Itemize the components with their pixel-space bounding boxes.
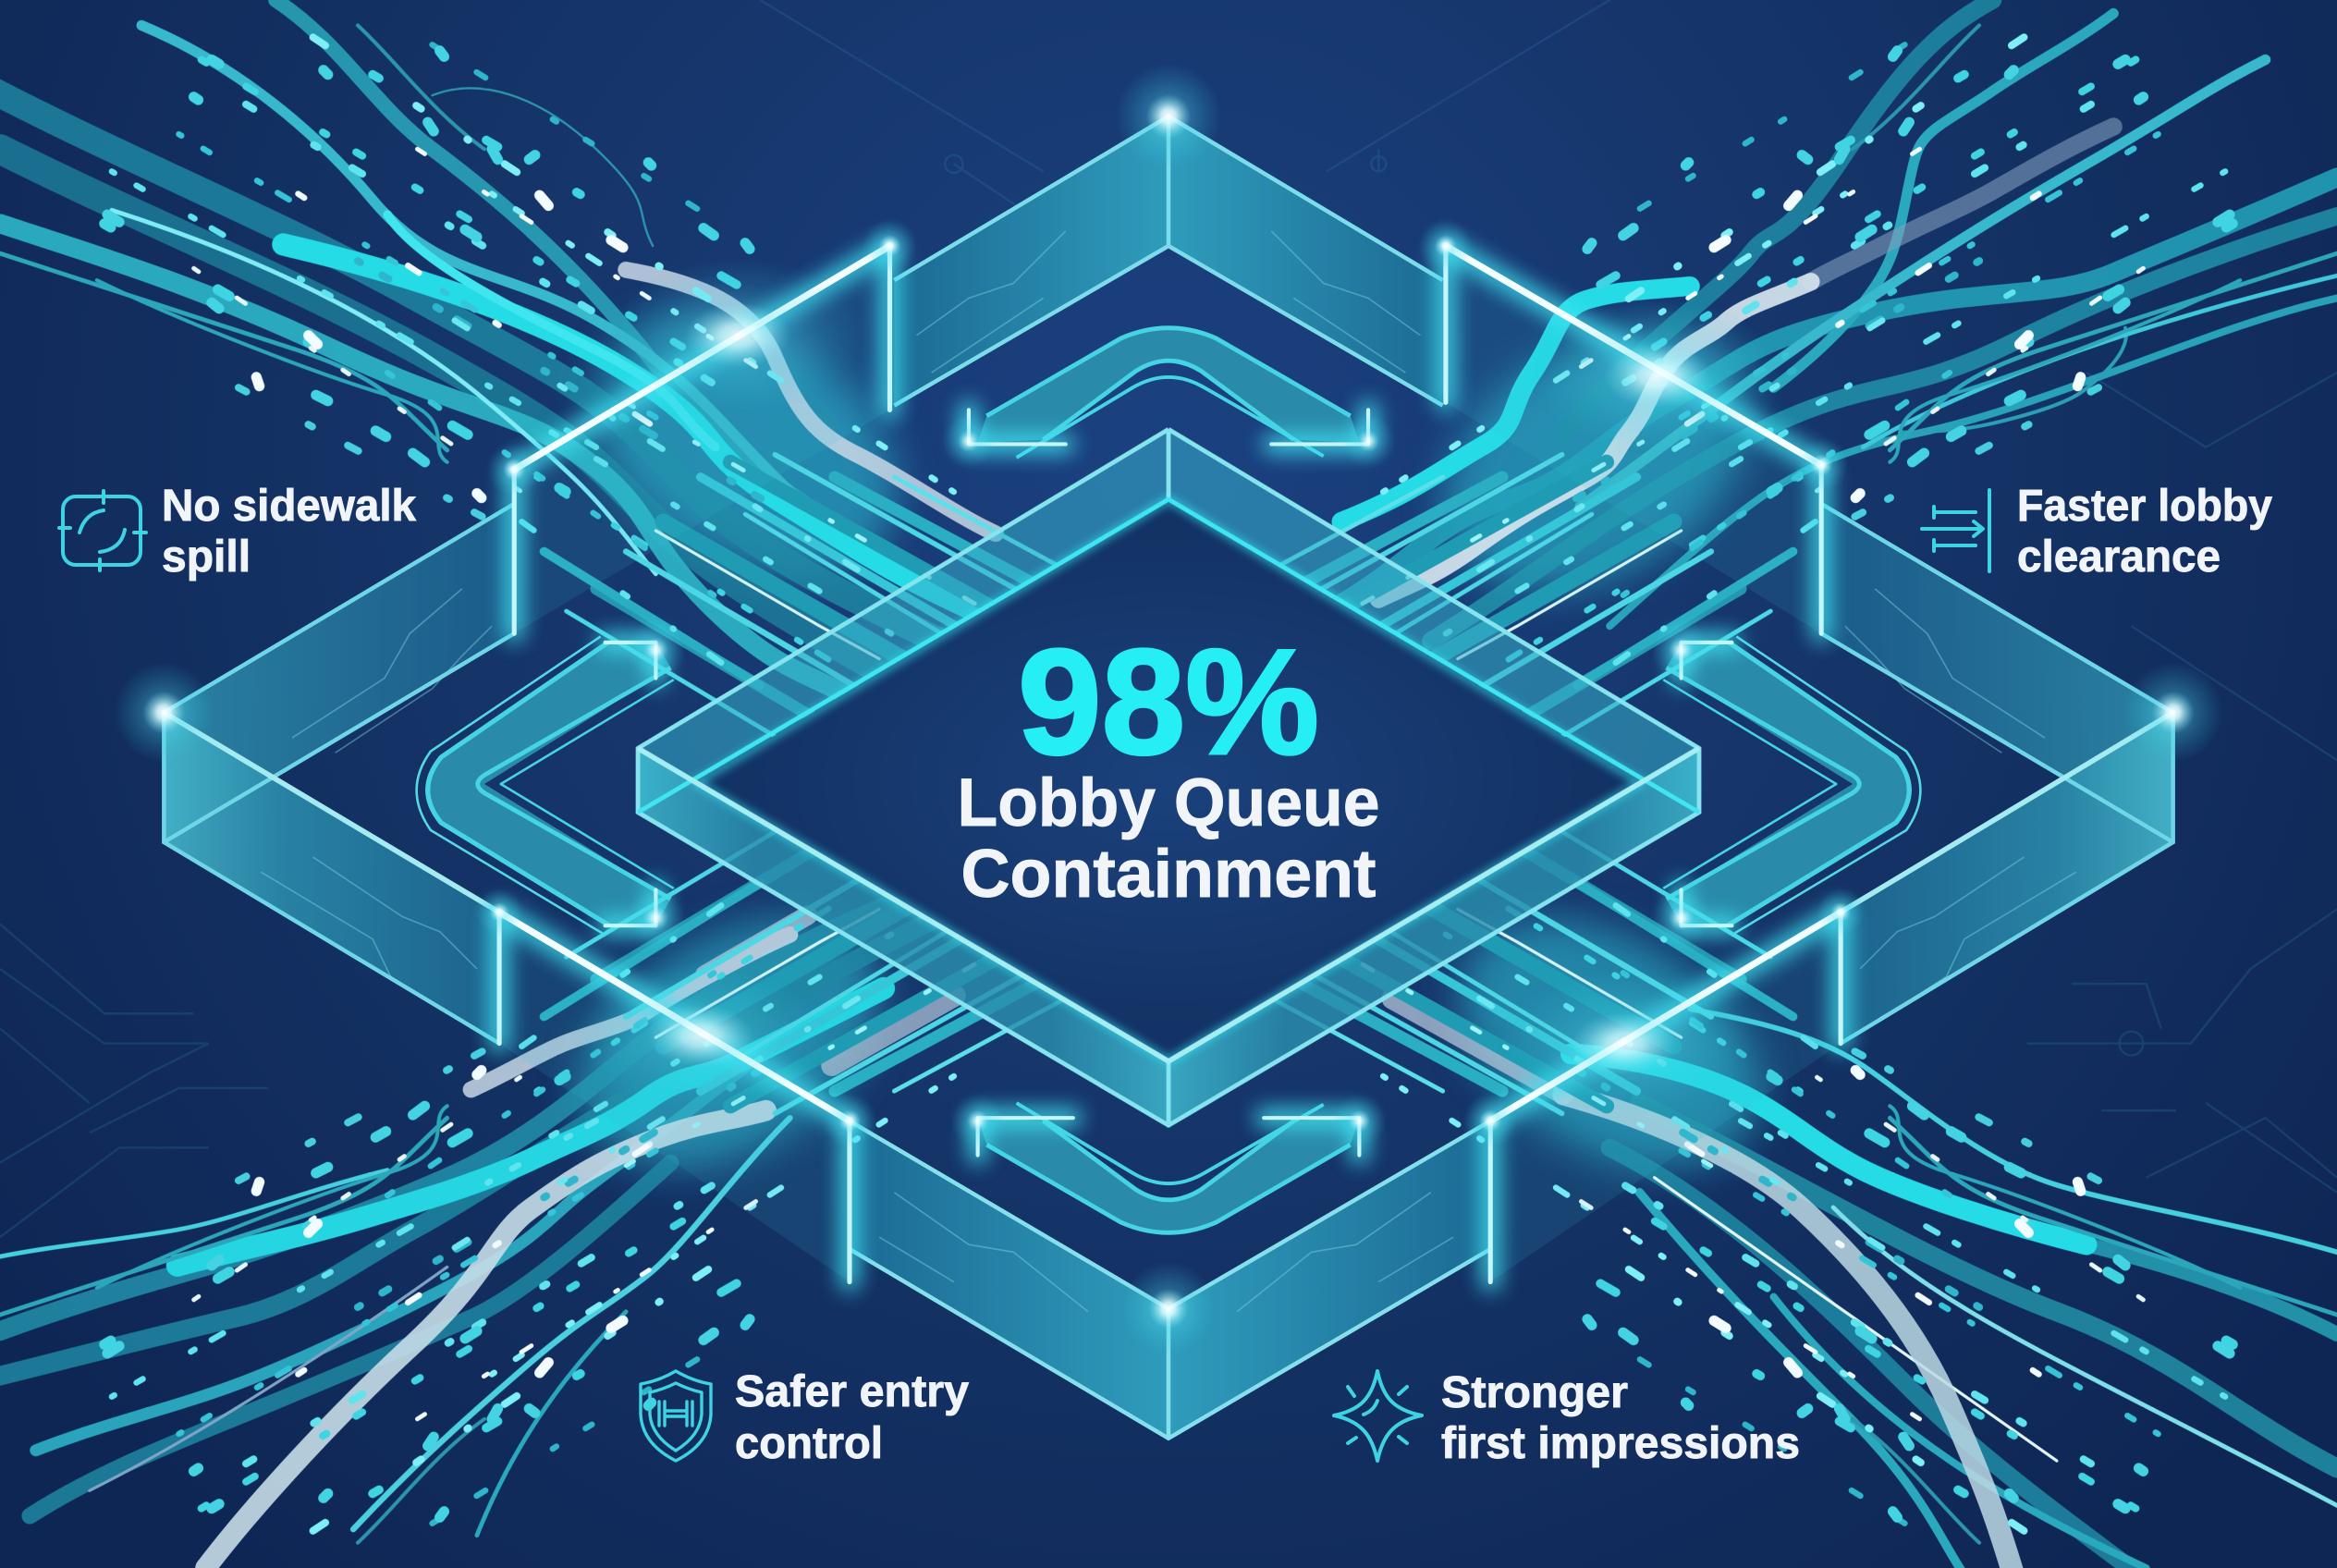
headline label: Lobby Queue Containment xyxy=(958,766,1379,912)
label: faster lobby clearance: Faster lobby xyxy=(2017,482,2272,531)
label: no sidewalk spill: No sidewalk xyxy=(162,482,416,531)
soft glow behind streams xyxy=(536,265,1804,1219)
particles and thin traces: lower left xyxy=(0,823,1073,1543)
label: stronger first impressions xyxy=(1441,1368,1800,1468)
inner chevron: top xyxy=(978,328,1359,458)
inner chevron: right xyxy=(1663,636,1920,933)
light flares at vertices and crossings xyxy=(114,63,2223,1356)
label: stronger first impressions: first impressions xyxy=(1441,1419,1800,1468)
outer frame: top chevron xyxy=(894,116,1443,406)
inner chevron: bottom xyxy=(978,1103,1359,1232)
headline label: Lobby Queue Containment: Containment xyxy=(961,837,1376,912)
gate panels xyxy=(499,246,1841,1282)
headline metric: 98%: 98% xyxy=(1018,619,1319,786)
central diamond container xyxy=(638,429,1699,1125)
label: faster lobby clearance: clearance xyxy=(2017,533,2221,582)
data stream bundle: lower right xyxy=(1392,998,2337,1568)
callout: faster lobby clearance xyxy=(1922,482,2272,582)
callout: stronger first impressions xyxy=(1334,1368,1800,1468)
icon: contained loop xyxy=(59,491,146,570)
label: faster lobby clearance xyxy=(2017,482,2272,582)
label: no sidewalk spill: spill xyxy=(162,533,251,582)
icon: four-point star xyxy=(1334,1371,1422,1461)
label: safer entry control: control xyxy=(735,1419,883,1468)
data stream bundle: upper right xyxy=(1341,0,2337,641)
particles and thin traces: upper right xyxy=(1264,25,2337,745)
icon: arrows to barrier xyxy=(1922,490,1989,571)
particles and thin traces: upper left xyxy=(0,25,1073,745)
outer frame: right chevron xyxy=(1821,504,2173,1044)
outer frame: left chevron xyxy=(164,504,514,1044)
label: safer entry control: Safer entry xyxy=(735,1367,969,1416)
particles and thin traces: lower right xyxy=(1264,823,2337,1543)
inner chevron: left xyxy=(417,636,674,933)
outer frame: bottom chevron xyxy=(850,1121,1490,1439)
headline label: Lobby Queue Containment: Lobby Queue xyxy=(958,766,1379,840)
glowing edges xyxy=(499,246,1841,1282)
callout: safer entry control xyxy=(641,1367,969,1468)
callout: no sidewalk spill xyxy=(59,482,416,582)
label: stronger first impressions: Stronger xyxy=(1441,1368,1628,1417)
data stream bundle: upper left xyxy=(0,0,996,701)
data stream bundle: lower left xyxy=(0,864,984,1568)
icon: shield xyxy=(641,1371,711,1461)
label: no sidewalk spill xyxy=(162,482,416,582)
label: safer entry control xyxy=(735,1367,969,1468)
